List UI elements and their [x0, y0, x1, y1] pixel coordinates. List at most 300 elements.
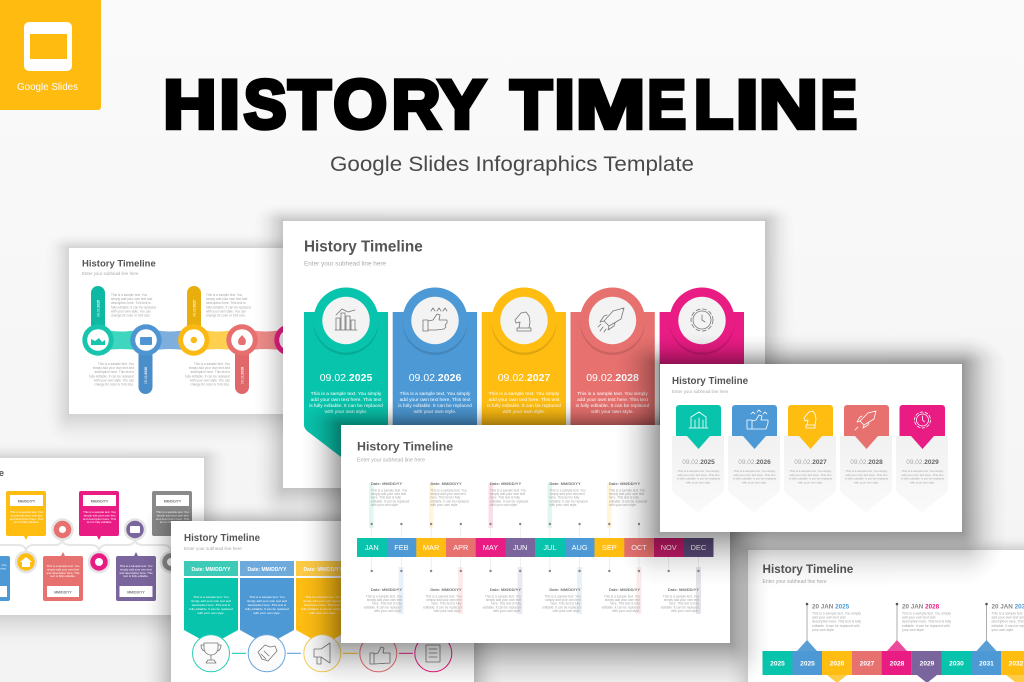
month labels: APR — [453, 543, 468, 552]
text blocks top: simply add your own text — [430, 492, 466, 496]
main title: I — [219, 66, 240, 143]
subheading: Enter your subhead line here — [82, 271, 139, 276]
date headers top: Date: MM/DD/YY — [371, 481, 402, 486]
month labels: JAN — [365, 543, 379, 552]
event 2031: your own style. — [992, 628, 1014, 632]
text blocks: with your own style. You can — [206, 309, 246, 313]
pennant: 2027 — [788, 405, 833, 484]
event 2028: your own style. — [902, 628, 925, 632]
card: 2026: 09.02.2026 — [409, 372, 461, 384]
year labels — [770, 660, 1024, 668]
text blocks: description here. This text is — [206, 301, 246, 305]
dots — [370, 523, 700, 572]
pennant: 2028: This is a sample text. You simply — [846, 469, 887, 473]
text blocks: fully editable. It can be replaced — [89, 374, 134, 378]
text blocks top: simply add your own text — [371, 492, 406, 496]
panel: slide with connected circles timeline — [69, 248, 369, 414]
text blocks: description here. This text is — [94, 370, 134, 374]
date headers bottom: Date: MM/DD/YY — [609, 587, 640, 592]
card: 2026: with your own style. — [414, 409, 456, 415]
text blocks bottom: simply add your own text — [426, 598, 462, 602]
icon circle: trophy — [192, 635, 230, 672]
text blocks bottom: here. This text is fully — [491, 602, 521, 606]
text blocks bottom: editable. It can be replaced — [364, 605, 402, 609]
month labels: JUL — [543, 543, 556, 552]
card: 2028: add your own text here. This text — [577, 397, 649, 403]
icon: chess knight — [515, 312, 531, 331]
text blocks top: here. This text is fully — [550, 496, 580, 500]
icon: thumbs up with stars — [423, 308, 447, 331]
card: 2028: is fully editable. It can be replaced — [576, 403, 650, 409]
text blocks bottom: with your own style. — [671, 609, 699, 613]
year labels: 2031 — [979, 660, 994, 668]
text blocks: change its color or font size. — [94, 382, 134, 386]
column: blue — [240, 561, 294, 645]
text blocks bottom: This is a sample text. You — [544, 594, 580, 598]
text blocks top: here. This text is fully — [609, 496, 639, 500]
column: blue: description here. This text is — [248, 603, 287, 607]
main title: N — [759, 66, 818, 143]
date headers top — [371, 481, 640, 486]
column: yellow: fully editable. It can be replaced — [301, 607, 345, 611]
text blocks bottom: editable. It can be replaced — [661, 605, 699, 609]
month labels: FEB — [394, 543, 409, 552]
card: 2028: 09.02.2028 — [586, 372, 639, 384]
text blocks: description here. This text is — [190, 370, 230, 374]
text blocks bottom: with your own style. — [553, 609, 581, 613]
year labels: 2027 — [860, 660, 875, 668]
text blocks top: This is a sample text. You — [550, 488, 586, 492]
main title: L — [694, 67, 733, 143]
event 2028: editable. It can be replaced with — [902, 624, 950, 628]
icon circle: document — [415, 635, 452, 672]
text blocks bottom: This is a sample text. You — [425, 594, 462, 598]
box: magenta: MM/DD/YY — [91, 500, 109, 504]
event 2031 — [992, 604, 1024, 632]
text blocks top: editable. It can be replaced — [609, 499, 648, 503]
text blocks top: with your own style. — [550, 503, 577, 507]
text blocks bottom: with your own style. — [374, 609, 402, 613]
box: yellow: MM/DD/YY — [18, 500, 36, 504]
main title: E — [821, 67, 857, 143]
text blocks top: editable. It can be replaced — [371, 499, 410, 503]
decorative markers top — [369, 483, 612, 528]
text blocks top: here. This text is fully — [371, 496, 401, 500]
month labels: SEP — [602, 543, 617, 552]
main title: S — [244, 67, 287, 143]
column: yellow: with your own style. — [310, 611, 337, 615]
event 2025: This is a sample text. You simply — [812, 612, 861, 616]
year bar — [762, 651, 1024, 675]
text blocks: change its color or font size. — [206, 314, 246, 318]
year labels: 2025 — [800, 660, 815, 668]
date headers bottom: Date: MM/DD/YY — [371, 587, 402, 592]
subheading: Enter your subhead line here — [184, 546, 242, 551]
date headers bottom: Date: MM/DD/YY — [549, 587, 581, 592]
main title: T — [510, 65, 552, 143]
stem dates — [96, 300, 244, 384]
text blocks top: here. This text is fully — [490, 496, 520, 500]
box: red: and description here. This — [46, 571, 80, 575]
text blocks bottom: editable. It can be replaced — [542, 605, 581, 609]
text blocks bottom: simply add your own text — [367, 598, 402, 602]
main title: R — [392, 66, 440, 143]
stem dates: 09.02.2026 — [144, 367, 148, 384]
text blocks top: simply add your own text — [609, 492, 644, 496]
column: blue: Date: MM/DD/YY — [248, 567, 287, 573]
text blocks: change its color or font size. — [111, 314, 151, 318]
box: yellow: text is fully editable. — [14, 520, 39, 524]
panel: slide with monthly timeline — [341, 425, 730, 643]
text blocks: simply add your own text and — [206, 297, 248, 301]
event 2028: 20 JAN 2028 — [902, 604, 940, 610]
event 2031: add your own text and — [992, 616, 1024, 620]
text blocks top: This is a sample text. You — [430, 488, 467, 492]
column: teal: with your own style. — [198, 611, 225, 615]
date headers bottom: Date: MM/DD/YY — [430, 587, 462, 592]
text blocks: with your own style. You can — [94, 378, 134, 382]
main title: I — [554, 66, 575, 143]
text blocks: with your own style. You can — [111, 309, 151, 313]
month labels: MAY — [483, 543, 498, 552]
stem dates: 09.02.2025 — [96, 300, 100, 317]
text blocks bottom: with your own style. — [612, 609, 640, 613]
subtitle: Google Slides Infographics Template — [330, 153, 694, 176]
box: red: text is fully editable. — [50, 574, 76, 578]
main title: I — [736, 66, 759, 143]
month bar — [357, 538, 714, 557]
box: purple: and description here. This — [119, 571, 153, 575]
box: purple: simply add your own text — [120, 567, 152, 571]
pennant: 2029: This is a sample text. You simply — [902, 469, 943, 473]
event 2025: your own style. — [812, 628, 835, 632]
main title: M — [576, 66, 645, 143]
month labels: OCT — [631, 543, 647, 552]
heading: History Timeline — [82, 258, 156, 270]
date headers bottom — [371, 587, 699, 592]
icon circle: thumbs up — [360, 635, 397, 672]
text blocks bottom: here. This text is fully — [432, 602, 462, 606]
text blocks: simply add your own text and — [189, 366, 230, 370]
pennant: 2026: This is a sample text. You simply — [734, 469, 775, 473]
pennant: 2028: is fully editable. It can be replaced — [845, 477, 889, 481]
card: 2026: is fully editable. It can be replaced — [398, 403, 472, 409]
event 2025: editable. It can be replaced with — [812, 624, 860, 628]
box: yellow: simply add your own text — [11, 513, 43, 517]
heading: History Timeline — [304, 238, 423, 256]
month labels: MAR — [423, 543, 439, 552]
text blocks bottom: with your own style. — [493, 609, 521, 613]
column: yellow: Date: MM/DD/YY — [304, 567, 343, 573]
text blocks: This is a sample text. You — [98, 362, 134, 366]
year labels: 2030 — [949, 660, 964, 668]
column: blue: fully editable. It can be replaced — [245, 607, 289, 611]
Google Slides badge — [0, 0, 101, 110]
column: teal — [184, 561, 238, 645]
text blocks: This is a sample text. You — [194, 362, 230, 366]
stems — [91, 286, 297, 394]
column: teal: fully editable. It can be replaced — [189, 607, 233, 611]
month labels: DEC — [691, 543, 707, 552]
year labels: 2029 — [920, 660, 935, 668]
pennant: 2027: 09.02.2027 — [794, 459, 827, 466]
main title: O — [333, 66, 387, 143]
pennant: 2026: add your own text here. This text — [734, 473, 776, 477]
date headers top: Date: MM/DD/YY — [550, 481, 581, 486]
subheading: Enter your subhead line here — [304, 260, 387, 268]
text blocks top: editable. It can be replaced — [490, 499, 529, 503]
box: purple: This is a sample text. You — [120, 564, 152, 568]
year labels: 2025 — [770, 660, 785, 668]
text blocks bottom: here. This text is fully — [551, 602, 581, 606]
node circles — [16, 520, 181, 572]
main title — [163, 65, 857, 143]
text blocks: description here. This text is — [111, 301, 151, 305]
decorative markers bottom — [398, 567, 701, 614]
tick lines — [372, 524, 698, 571]
card: 2025: with your own style. — [325, 409, 367, 415]
text blocks bottom: here. This text is fully — [372, 602, 402, 606]
box: red: This is a sample text. You — [47, 564, 79, 568]
card: 2025: 09.02.2025 — [320, 372, 372, 384]
text blocks: fully editable. It can be replaced — [111, 305, 156, 309]
main title: H — [163, 66, 217, 143]
text blocks: with your own style. You can — [190, 378, 230, 382]
pennant: 2026: 09.02.2026 — [738, 459, 771, 466]
text blocks bottom: here. This text is fully — [669, 602, 699, 606]
card: 2027: add your own text here. This text — [489, 397, 560, 403]
text blocks bottom: This is a sample text. You — [663, 594, 699, 598]
text blocks: fully editable. It can be replaced — [185, 374, 230, 378]
date headers top: Date: MM/DD/YY — [490, 481, 521, 486]
box: yellow: and description here. This — [10, 517, 44, 521]
text blocks bottom: with your own style. — [434, 609, 462, 613]
subheading: Enter your subhead line here — [672, 389, 729, 394]
pennant: 2029: add your own text here. This text — [902, 473, 944, 477]
box: magenta: text is fully editable. — [87, 520, 112, 524]
date headers bottom: Date: MM/DD/YY — [490, 587, 521, 592]
pennant: 2029 — [900, 405, 945, 484]
box: gray: This is a sample text. You — [156, 510, 189, 514]
icon: rocket — [598, 308, 624, 332]
box: magenta: and description here. This — [83, 517, 117, 521]
card: 2029 — [660, 288, 744, 425]
text blocks top: with your own style. — [371, 503, 399, 507]
connector lines — [0, 538, 171, 552]
box: gray: and description here. This — [156, 517, 190, 521]
text blocks top: This is a sample text. You — [490, 488, 526, 492]
card: 2025 — [304, 288, 388, 457]
heading: History Timeline — [762, 563, 854, 576]
stem dates: 09.02.2027 — [192, 300, 196, 317]
text blocks top: editable. It can be replaced — [550, 499, 588, 503]
box: yellow — [6, 491, 46, 540]
pennant: 2029: 09.02.2029 — [906, 459, 939, 466]
pennant: 2027: This is a sample text. You simply — [790, 469, 831, 473]
icon: gear with clock — [691, 309, 713, 331]
icon: slides logo — [24, 22, 72, 71]
heading: History Timeline — [184, 533, 261, 544]
pennant backgrounds — [672, 436, 948, 513]
card: 2028: This is a sample text. You simply — [577, 392, 648, 397]
text blocks bottom: This is a sample text. You — [485, 594, 521, 598]
event 2028: add your own text and — [902, 616, 935, 620]
text blocks bottom — [364, 594, 699, 613]
box: purple — [116, 552, 156, 601]
column: teal: This is a sample text. You — [193, 595, 229, 599]
column: yellow: This is a sample text. You — [305, 595, 341, 599]
column: teal: simply add your own text and — [191, 599, 231, 603]
icon: bar chart — [335, 309, 357, 330]
icon circle: megaphone — [304, 635, 341, 672]
text blocks bottom: simply add your own text — [664, 598, 699, 602]
text blocks: fully editable. It can be replaced — [206, 305, 251, 309]
box: gray: simply add your own text — [157, 513, 189, 517]
box: gray: text is fully editable. — [160, 520, 185, 524]
pennant: 2025: is fully editable. It can be replaced — [677, 477, 721, 481]
year labels: 2028 — [890, 660, 905, 668]
year labels: 2026 — [830, 660, 845, 668]
month labels: NOV — [661, 543, 677, 552]
text blocks top: This is a sample text. You — [609, 488, 645, 492]
text blocks top: with your own style. — [430, 503, 458, 507]
text blocks top: This is a sample text. You — [371, 488, 407, 492]
text blocks bottom: editable. It can be replaced — [602, 605, 640, 609]
event 2025: 20 JAN 2025 — [812, 604, 850, 610]
pennant: 2025 — [676, 405, 721, 484]
card: 2026 — [393, 288, 477, 425]
icon circle: handshake — [248, 635, 285, 672]
text blocks bottom: simply add your own text — [545, 598, 581, 602]
pennant: 2029: with your own style. — [910, 480, 935, 484]
pennant: 2028: 09.02.2028 — [850, 459, 883, 466]
text blocks top — [371, 488, 648, 507]
card: 2025: add your own text here. This text — [311, 397, 382, 403]
date headers top: Date: MM/DD/YY — [609, 481, 640, 486]
pennant: 2028 — [844, 405, 889, 484]
text blocks: simply add your own text and — [111, 297, 153, 301]
event 2025: add your own text and — [812, 616, 845, 620]
panel: slide with pointed columns and circles — [171, 521, 474, 682]
event 2025: description here. This text is fully — [812, 620, 861, 624]
box: red: MM/DD/YY — [54, 590, 72, 594]
box: magenta: This is a sample text. You — [83, 510, 116, 514]
heading: History Timeline — [357, 440, 453, 454]
text blocks: This is a sample text. You — [111, 293, 147, 297]
column: blue: This is a sample text. You — [249, 595, 285, 599]
pennant: 2026: is fully editable. It can be replaced — [733, 477, 777, 481]
card: 2027: with your own style. — [503, 409, 545, 415]
text blocks: change its color or font size. — [190, 382, 230, 386]
card: 2028: with your own style. — [591, 409, 634, 415]
date headers bottom: Date: MM/DD/YY — [668, 587, 699, 592]
card: 2026: add your own text here. This text — [400, 397, 471, 403]
pennant: 2025: This is a sample text. You simply — [678, 469, 719, 473]
panel: slide with yearly timeline — [748, 550, 1024, 682]
connector bands — [98, 328, 290, 352]
node icons — [91, 335, 246, 345]
text blocks top: with your own style. — [490, 503, 518, 507]
text blocks bottom: This is a sample text. You — [366, 594, 402, 598]
month labels: AUG — [572, 543, 588, 552]
pennant: 2027: add your own text here. This text — [790, 473, 832, 477]
box: red — [43, 552, 83, 601]
text blocks: simply add your own text and — [93, 366, 134, 370]
box: purple: MM/DD/YY — [127, 590, 145, 594]
pennant: 2028: with your own style. — [854, 480, 879, 484]
pennant: 2026 — [732, 405, 777, 484]
card: 2027: is fully editable. It can be replaced — [487, 403, 561, 409]
panel: slide with pennant cards — [660, 364, 962, 532]
text blocks top: simply add your own text — [490, 492, 525, 496]
card: 2027 — [482, 288, 566, 425]
pennant: 2027: is fully editable. It can be replaced — [789, 477, 833, 481]
event 2028: description here. This text is fully — [902, 620, 951, 624]
box: gray — [152, 491, 192, 536]
panel: slide with large colored cards — [283, 221, 765, 488]
main title: T — [288, 65, 331, 143]
stem dates: 09.02.2028 — [240, 367, 244, 384]
pointer stems — [807, 604, 986, 641]
node icons — [20, 526, 175, 567]
main title: E — [647, 65, 686, 143]
text blocks bottom: simply add your own text — [486, 598, 521, 602]
column: blue: with your own style. — [254, 611, 281, 615]
text blocks bottom: simply add your own text — [605, 598, 640, 602]
column: blue: simply add your own text and — [247, 599, 287, 603]
column: yellow: description here. This text is — [304, 603, 343, 607]
subheading: Enter your subhead line here — [357, 458, 425, 464]
text blocks bottom: editable. It can be replaced — [423, 605, 462, 609]
main title: Y — [438, 66, 486, 143]
card: 2028 — [570, 288, 655, 425]
year labels: 2032 — [1009, 660, 1024, 668]
circle connectors — [232, 652, 413, 654]
box: purple: text is fully editable. — [123, 574, 149, 578]
card: 2025: is fully editable. It can be replaced — [309, 403, 383, 409]
month labels — [365, 543, 707, 552]
text blocks bottom: editable. It can be replaced — [483, 605, 521, 609]
box: magenta: simply add your own text — [84, 513, 116, 517]
box: yellow: This is a sample text. You — [10, 510, 43, 514]
pennant: 2026: with your own style. — [742, 480, 767, 484]
column: yellow — [296, 561, 350, 645]
month labels: JUN — [513, 543, 527, 552]
text blocks top: simply add your own text — [550, 492, 585, 496]
card: 2026: This is a sample text. You simply — [400, 392, 470, 397]
card: 2025: This is a sample text. You simply — [311, 392, 381, 397]
text blocks top: here. This text is fully — [430, 496, 461, 500]
pennant: 2028: add your own text here. This text — [846, 473, 888, 477]
text blocks: This is a sample text. You — [206, 293, 242, 297]
pennant: 2029: is fully editable. It can be replaced — [901, 477, 945, 481]
pennant: 2025: 09.02.2025 — [682, 459, 715, 466]
badge label: Google Slides — [17, 82, 78, 93]
box: gray: MM/DD/YY — [164, 500, 182, 504]
pennant: 2025: add your own text here. This text — [678, 473, 720, 477]
pointer dots — [806, 603, 988, 605]
text blocks — [89, 293, 251, 386]
text blocks top: editable. It can be replaced — [430, 499, 469, 503]
card: 2027: 09.02.2027 — [498, 372, 550, 384]
heading: History Timeline — [672, 376, 749, 387]
subheading: Enter your subhead line here — [762, 579, 827, 585]
column: teal: description here. This text is — [192, 603, 231, 607]
pennant: 2025: with your own style. — [686, 480, 711, 484]
column: yellow: simply add your own text and — [303, 599, 343, 603]
text blocks bottom: This is a sample text. You — [604, 594, 640, 598]
nodes — [82, 324, 306, 356]
